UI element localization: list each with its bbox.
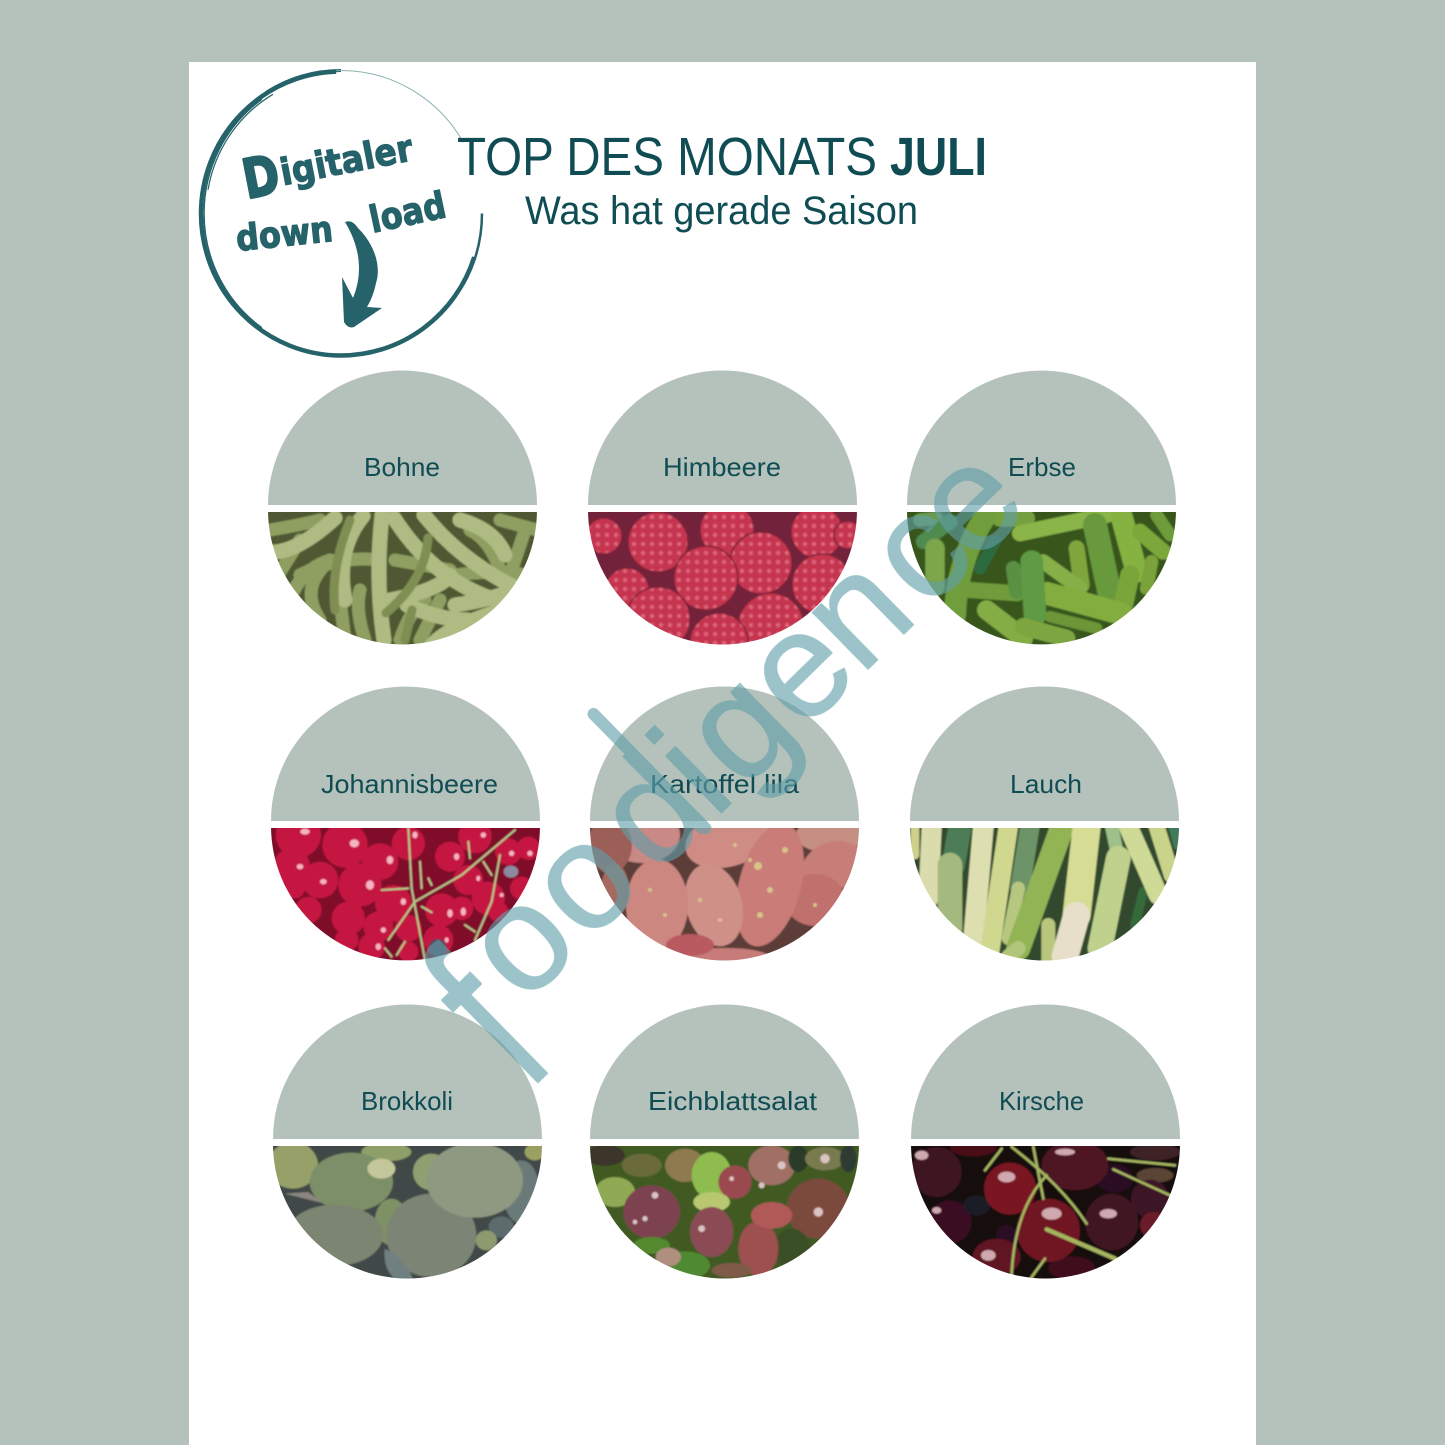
label text: Bohne — [364, 452, 440, 482]
photo: raspberries — [588, 511, 857, 644]
stamp text: download: load — [365, 184, 450, 242]
stamp text: Digitaler: igitaler — [277, 126, 417, 194]
label text: Johannisbeere — [321, 769, 498, 799]
item: Kirsche — [905, 1004, 1186, 1285]
photo: oak leaf lettuce — [590, 1145, 859, 1278]
watermark: foodigence: f — [378, 909, 594, 1128]
stamp text: Digitaler: D — [237, 143, 285, 211]
label panel — [911, 1004, 1180, 1139]
white sheet — [189, 62, 1256, 1445]
label panel — [273, 1004, 542, 1139]
brush circle — [200, 70, 482, 356]
label text: Eichblattsalat — [648, 1086, 818, 1116]
photo: broccoli — [273, 1145, 542, 1278]
subtitle: Was hat gerade Saison — [525, 189, 918, 233]
item: Lauch — [904, 686, 1185, 967]
label panel — [271, 687, 540, 821]
photo: peas — [907, 511, 1176, 644]
title: JULI — [890, 127, 987, 187]
stamp text: download — [234, 184, 450, 260]
item: Bohne — [262, 371, 543, 651]
title: TOP DES MONATS — [457, 127, 877, 187]
photo: potatoes — [590, 827, 859, 960]
item: Johannisbeere — [265, 687, 546, 967]
photo: cherries — [911, 1145, 1180, 1278]
label text: Lauch — [1010, 769, 1082, 799]
watermark: foodigence: oodigence — [429, 411, 1055, 1029]
label text: Brokkoli — [361, 1086, 453, 1116]
label panel — [907, 371, 1176, 505]
item: Kartoffel lila — [584, 686, 871, 967]
item: Himbeere — [588, 370, 857, 644]
photo: leek — [910, 827, 1179, 960]
label text: Erbse — [1008, 452, 1076, 482]
label text: Kartoffel lila — [650, 769, 800, 799]
stamp: digital download — [200, 70, 482, 356]
label text: Kirsche — [999, 1086, 1084, 1116]
stamp text: Digitaler — [237, 117, 419, 211]
label panel — [590, 686, 859, 821]
photo: beans — [268, 511, 537, 644]
label text: Himbeere — [663, 452, 781, 482]
label panel — [910, 686, 1179, 821]
label panel — [268, 371, 537, 505]
item: Erbse — [901, 371, 1182, 651]
item: Eichblattsalat — [584, 1004, 865, 1285]
item: Brokkoli — [267, 1004, 548, 1285]
photo: red currants — [271, 826, 540, 960]
stamp text: download: down — [234, 209, 335, 260]
label panel — [588, 370, 857, 505]
label panel — [590, 1004, 859, 1139]
icon: arrow — [342, 221, 382, 327]
